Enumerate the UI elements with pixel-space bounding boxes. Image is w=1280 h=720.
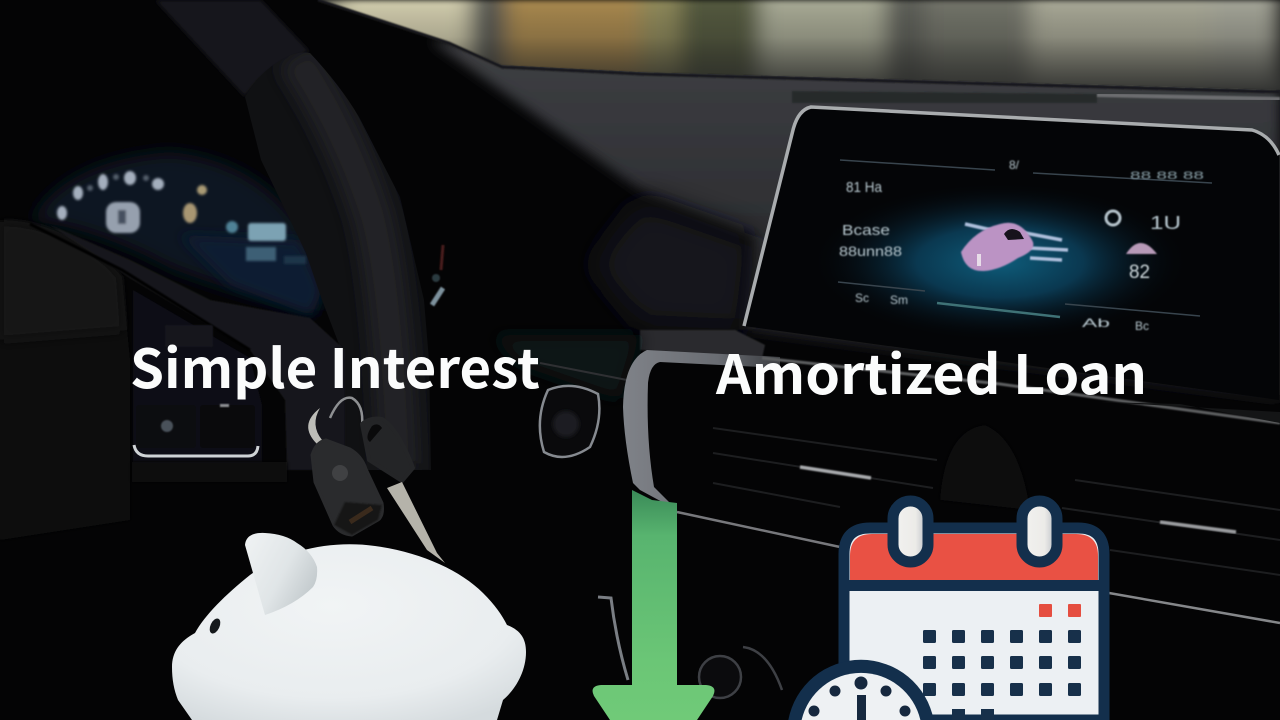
screen readouts: Bcase — [842, 222, 890, 239]
weather icons — [1106, 211, 1157, 254]
screen readouts: Sm — [890, 293, 908, 307]
calendar header — [850, 534, 1098, 580]
screen readouts: Sc — [855, 291, 869, 305]
gauge tick marks — [57, 171, 207, 223]
screen readouts: 82 — [1129, 262, 1150, 283]
date squares — [923, 630, 1081, 720]
heading: simple interest: Simple Interest — [130, 325, 540, 404]
wheel hub — [0, 220, 130, 540]
icon: piggy bank — [172, 533, 526, 720]
screen readouts: Ab — [1082, 316, 1111, 330]
arrow: green downward — [593, 490, 714, 720]
calendar frame — [844, 528, 1104, 720]
screen readouts: 8/ — [1009, 158, 1020, 172]
binder rings — [893, 501, 1057, 562]
console top — [640, 330, 765, 358]
icon: car key — [308, 398, 445, 563]
start button — [540, 386, 599, 457]
car illustration — [961, 223, 1068, 271]
heading: amortized loan: Amortized Loan — [715, 331, 1147, 410]
screen readouts — [839, 158, 1204, 333]
car interior background — [317, 0, 1280, 404]
screen readouts: 88unn88 — [839, 243, 902, 259]
screen glow — [815, 184, 1185, 340]
infotainment screen — [744, 107, 1279, 400]
upper rim — [155, 0, 310, 97]
console frame — [623, 350, 780, 510]
steering wheel — [0, 0, 443, 540]
cluster status — [226, 221, 306, 264]
screen readouts: 81 Ha — [846, 179, 883, 196]
steering controls — [132, 290, 287, 482]
speed readout — [106, 202, 140, 233]
lower rim — [240, 45, 435, 475]
dashboard top surface — [430, 40, 1280, 400]
warning lights — [432, 245, 443, 305]
icon: calendar — [788, 501, 1104, 720]
instrument cluster — [35, 152, 322, 316]
red date squares — [1039, 604, 1081, 617]
pig eye — [208, 617, 222, 635]
dash trim — [762, 358, 1280, 423]
lower console curve — [598, 597, 628, 680]
vent details and console — [490, 330, 1280, 698]
spoke — [50, 225, 345, 470]
screen divider lines — [838, 160, 1212, 317]
windshield view — [280, 0, 1280, 95]
clock — [788, 660, 934, 720]
screen readouts: 88 88 88 — [1130, 170, 1204, 182]
pig ear — [245, 533, 317, 615]
screen readouts: Bc — [1135, 319, 1149, 333]
screen readouts: 1U — [1150, 213, 1181, 233]
